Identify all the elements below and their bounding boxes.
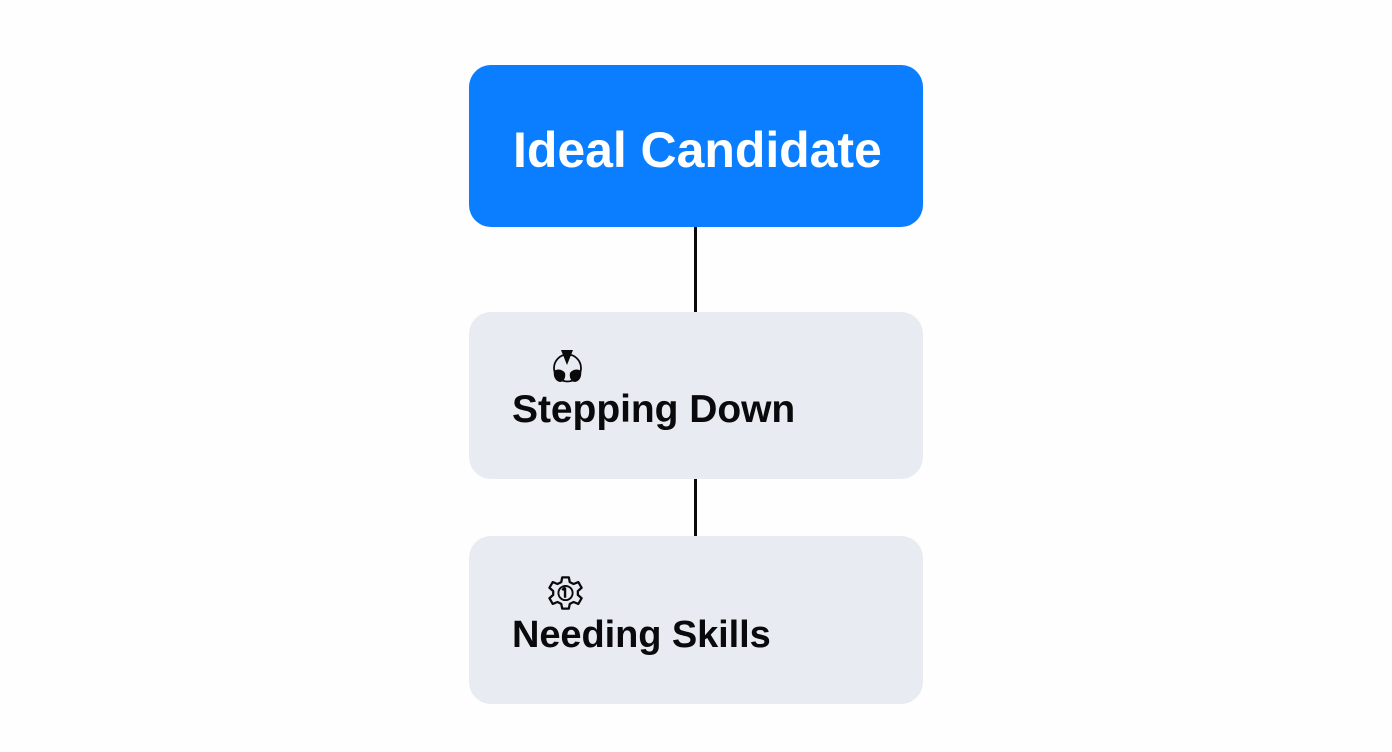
panel: Ideal Candidate (469, 65, 923, 227)
panel: Stepping Down (469, 312, 923, 479)
panel: Needing Skills (469, 536, 923, 704)
label: Stepping Down: Stepping Down (512, 388, 795, 431)
connector: top to Stepping Down (694, 227, 697, 312)
connector: Stepping Down to Needing Skills (694, 479, 697, 536)
icon: stepping down (553, 350, 582, 382)
label: Needing Skills: Needing Skills (512, 614, 771, 656)
icon: gear (548, 576, 583, 610)
heading: Ideal Candidate: Ideal Candidate (513, 122, 882, 178)
